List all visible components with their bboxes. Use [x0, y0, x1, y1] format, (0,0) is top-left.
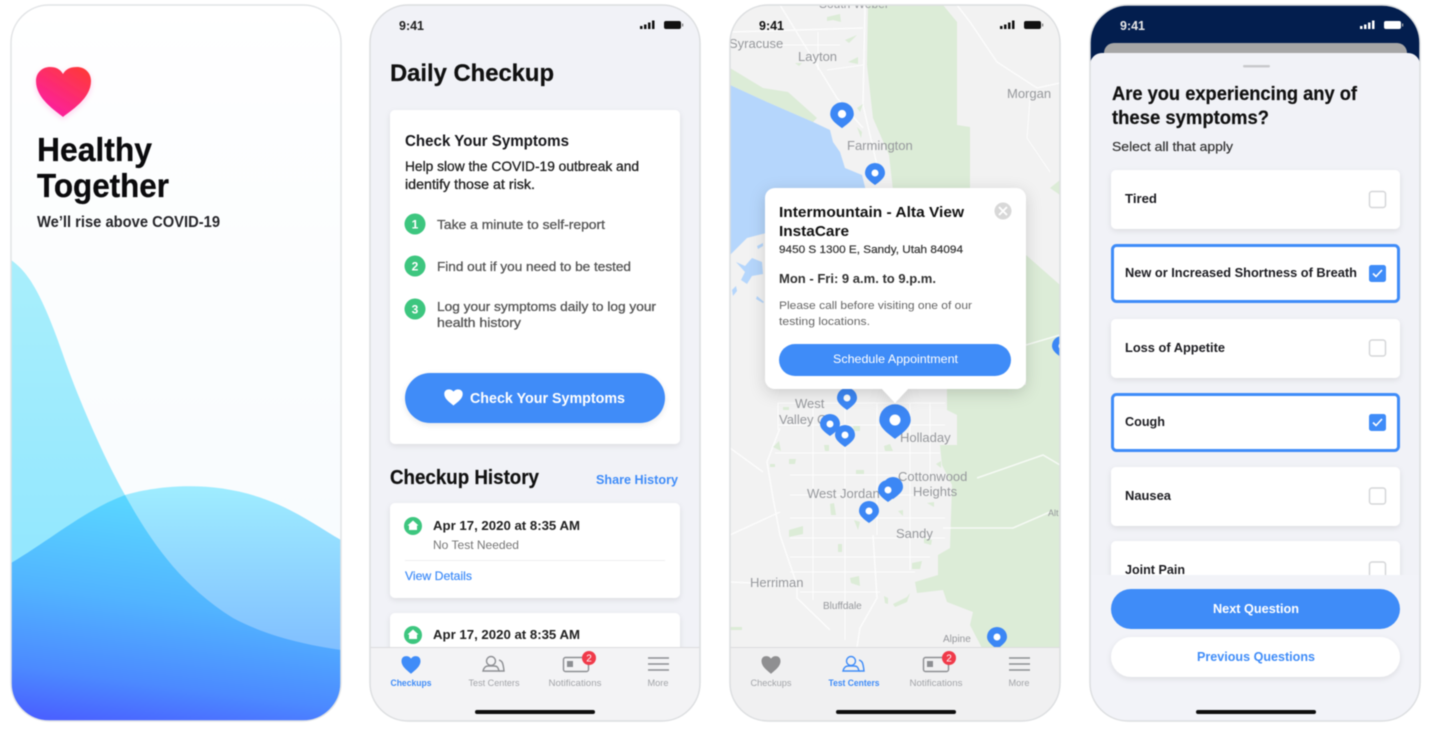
- tab bar: More: [1008, 678, 1030, 689]
- tab bar: [730, 647, 1060, 721]
- button: previous questions: [1111, 637, 1400, 677]
- map: place labels: West: [795, 396, 825, 411]
- map: lake: [730, 85, 867, 255]
- step 3: [404, 298, 657, 330]
- map: place labels: Morgan: [1007, 86, 1051, 101]
- icon: notifications tab with badge: [564, 651, 596, 672]
- map: place labels: Holladay: [900, 430, 951, 445]
- footer panel: [1090, 575, 1420, 721]
- button: check your symptoms: [405, 373, 665, 423]
- map: lake marsh fragments: [732, 243, 764, 303]
- stacked sheet behind: [1104, 43, 1407, 73]
- option: joint pain: Joint Pain: [1125, 562, 1185, 577]
- option: loss of appetite: [1111, 319, 1400, 378]
- tab bar: Test Centers: [468, 678, 520, 689]
- icon: more tab: [1009, 658, 1030, 670]
- callout: test center details popup: Mon - Fri: 9 a.m. to 9.p.m.: [779, 272, 936, 286]
- heading: symptoms question: Are you experiencing any of: [1112, 84, 1358, 105]
- option: cough (selected): Cough: [1125, 414, 1165, 429]
- icon: notifications tab with badge: 2: [946, 654, 952, 664]
- map: place labels: [729, 0, 1059, 645]
- wave: left light wave: [11, 260, 126, 563]
- heading: symptoms question: these symptoms?: [1112, 108, 1269, 129]
- option: nausea: Nausea: [1125, 488, 1172, 503]
- step 3: health history: [437, 315, 522, 330]
- button: schedule appointment: [779, 344, 1011, 376]
- navy header: [1090, 5, 1420, 65]
- tab bar: Checkups: [750, 678, 792, 689]
- heading: checkup history: Checkup History: [390, 467, 540, 489]
- panel: history entry 2: Apr 17, 2020 at 8:35 AM: [433, 627, 580, 642]
- option: loss of appetite: Loss of Appetite: [1125, 340, 1225, 355]
- status bar: 9:41: [759, 18, 784, 33]
- panel: history entry 2: [390, 614, 680, 647]
- icon: more tab: [648, 658, 669, 670]
- map: roads: [775, 29, 1060, 593]
- status bar: [758, 20, 1044, 31]
- status bar: 9:41: [1120, 18, 1145, 33]
- icon: heart tab: [762, 656, 780, 674]
- step 1: 1: [412, 218, 419, 232]
- map: place labels: Alpine: [943, 634, 971, 645]
- panel: check your symptoms card: identify those at risk.: [405, 176, 535, 192]
- panel: check your symptoms card: Help slow the COVID-19 outbreak and: [405, 158, 639, 174]
- step 3: Log your symptoms daily to log your: [437, 299, 657, 314]
- map: place labels: Cottonwood: [898, 469, 967, 484]
- map: green areas: [730, 5, 1060, 650]
- icon: notifications tab with badge: [924, 651, 956, 672]
- status bar: [1120, 18, 1403, 33]
- map: place labels: Farmington: [847, 138, 913, 153]
- map: place labels: Herriman: [750, 575, 803, 590]
- step 3: 3: [412, 302, 419, 316]
- panel: history entry 1: No Test Needed: [433, 538, 519, 552]
- step 2: Find out if you need to be tested: [437, 259, 631, 274]
- wave: deep blue overlap: [11, 495, 341, 721]
- map: place labels: Alt: [1048, 508, 1059, 518]
- panel: history entry 1: View Details: [405, 569, 472, 583]
- home indicator: [475, 710, 595, 714]
- home indicator: [836, 710, 956, 714]
- button: previous questions: Previous Questions: [1197, 649, 1315, 664]
- button: next question: Next Question: [1213, 601, 1299, 616]
- button: next question: [1111, 589, 1400, 629]
- icon: heart tab: [402, 656, 420, 674]
- option: shortness of breath (selected): New or Increased Shortness of Breath: [1125, 265, 1357, 280]
- sheet: [1090, 53, 1420, 721]
- step 2: 2: [412, 260, 419, 274]
- title: [37, 131, 169, 204]
- tab bar: Notifications: [548, 678, 602, 689]
- panel: history entry 1: [390, 503, 680, 598]
- heading: symptoms question: [1112, 84, 1358, 129]
- panel: check your symptoms card: [390, 110, 680, 444]
- phone 4: symptoms questionnaire screen: [1090, 5, 1420, 721]
- phone 1: splash screen: [11, 5, 341, 721]
- map: place labels: Valley C: [779, 412, 826, 427]
- map: place labels: Syracuse: [729, 36, 783, 51]
- icon: gradient heart: [36, 67, 91, 117]
- phone 3: test centers map screen: [729, 0, 1072, 721]
- option: tired: [1111, 170, 1400, 229]
- wave: right light wave: [124, 486, 341, 650]
- tab bar: Notifications: [910, 678, 963, 689]
- option: nausea: [1111, 467, 1400, 526]
- status bar: 9:41: [399, 18, 424, 33]
- option: cough (selected): [1112, 394, 1398, 450]
- link: share history: Share History: [596, 472, 679, 487]
- button: schedule appointment: Schedule Appointment: [833, 352, 959, 366]
- callout: test center details popup: testing locations.: [779, 316, 870, 328]
- callout: test center details popup: 9450 S 1300 E, Sandy, Utah 84094: [779, 244, 963, 256]
- title: Healthy: [37, 131, 153, 168]
- map: place labels: Heights: [913, 484, 958, 499]
- map: small parks: [730, 14, 941, 630]
- map: place labels: West Jordan: [807, 486, 880, 501]
- callout: test center details popup: Please call before visiting one of our: [779, 300, 972, 312]
- map: location pins: [820, 102, 1072, 649]
- icon: close: [994, 202, 1012, 220]
- icon: notifications tab with badge: 2: [586, 654, 592, 664]
- map: place labels: Sandy: [896, 526, 933, 541]
- phone 2: daily checkup screen: [370, 5, 700, 721]
- heading: daily checkup: Daily Checkup: [390, 60, 554, 87]
- tab bar: Test Centers: [828, 678, 880, 689]
- step 1: [404, 214, 605, 234]
- callout: test center details popup: [765, 188, 1026, 403]
- subtitle: We’ll rise above COVID-19: [37, 214, 220, 231]
- tab bar: Checkups: [390, 678, 432, 689]
- map: place labels: Layton: [798, 49, 837, 64]
- instruction: Select all that apply: [1112, 139, 1234, 154]
- map: place labels: Bluffdale: [823, 601, 862, 612]
- option: joint pain: [1111, 541, 1400, 600]
- tab bar: More: [648, 678, 668, 689]
- sheet handle: [1243, 65, 1270, 68]
- step 1: Take a minute to self-report: [437, 217, 605, 232]
- icon: test centers tab: [483, 656, 504, 671]
- status bar: [398, 20, 684, 31]
- icon: test centers tab: [843, 656, 864, 671]
- panel: check your symptoms card: Check Your Symptoms: [405, 133, 569, 150]
- panel: history entry 1: Apr 17, 2020 at 8:35 AM: [433, 518, 580, 533]
- step 2: [404, 256, 631, 276]
- title: Together: [37, 167, 169, 204]
- option: tired: Tired: [1125, 191, 1157, 206]
- tab bar: [370, 647, 700, 721]
- button: check your symptoms: Check Your Symptoms: [470, 390, 625, 407]
- callout: test center details popup: Intermountain - Alta View: [779, 204, 964, 221]
- callout: test center details popup: InstaCare: [779, 223, 849, 240]
- option: shortness of breath (selected): [1112, 246, 1398, 302]
- home indicator: [1196, 710, 1316, 714]
